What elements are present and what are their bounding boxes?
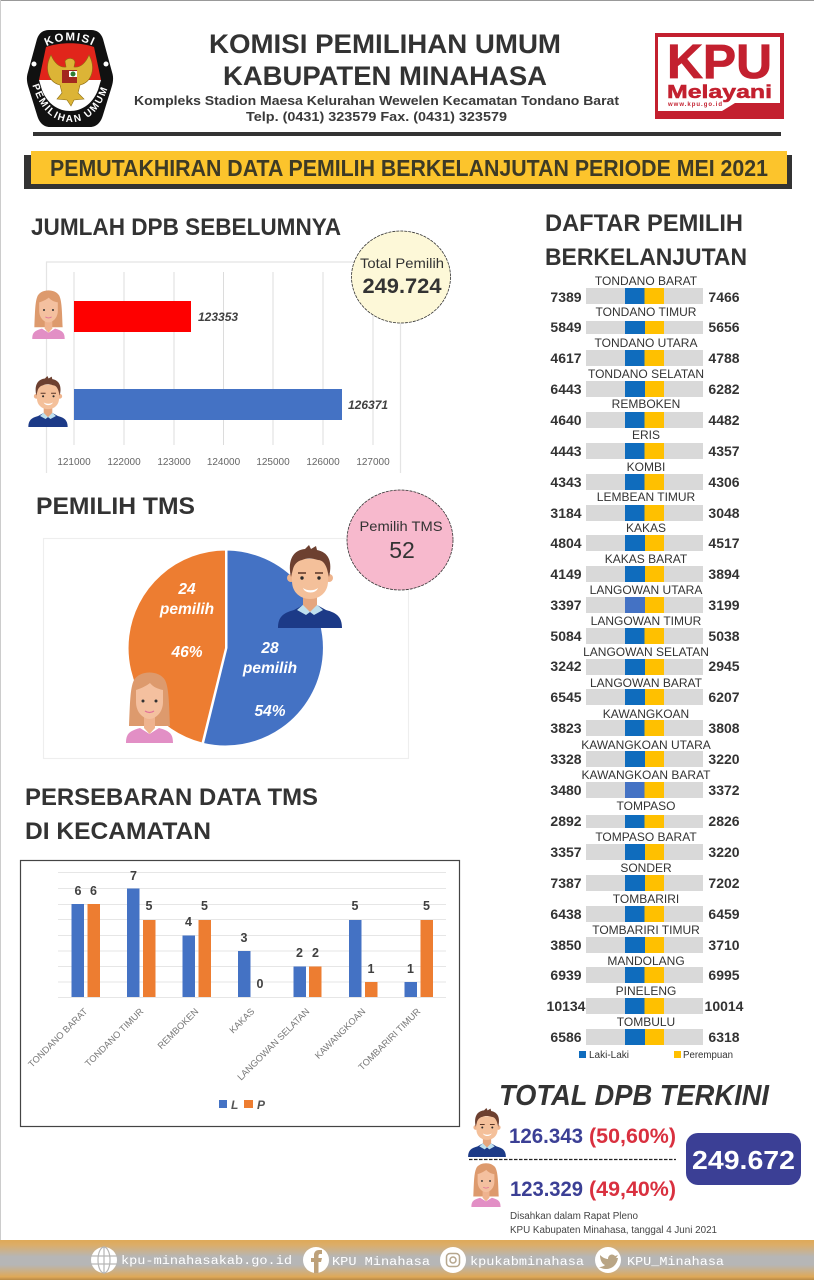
bar values: 5 [423,899,430,913]
bar: male previous [74,389,342,420]
row: Tondano Barat: 7389 [550,289,582,305]
axis labels: 121000 [57,457,91,468]
heading: TMS voters: PEMILIH TMS [36,493,195,520]
icon: man total [468,1108,506,1157]
row: Tombariri Timur [550,923,740,953]
pie labels: male: 28 [260,640,279,657]
stat: grand total [686,1133,801,1185]
row: Eris: ERIS [632,428,660,442]
row: Langowan Timur [550,614,740,644]
banner: report title [24,151,792,189]
axis labels: 122000 [107,457,141,468]
value: male previous: 126371 [348,398,388,412]
bar: female previous [74,301,191,332]
icon: man previous [28,376,68,427]
axis labels: 125000 [256,457,290,468]
panel: TMS by district bar chart [20,860,460,1126]
row: Tombulu: 6586 [550,1029,582,1045]
row: Tondano Utara [550,336,740,366]
bar values: 6 [75,884,82,898]
row: Tondano Barat: 7466 [708,289,740,305]
heading: institution name and address: Telp. (0431) 323579 Fax. (0431) 323579 [246,109,507,124]
heading: institution name and address: KABUPATEN MINAHASA [223,61,547,91]
row: Tondano Utara: 4788 [708,350,740,366]
row: Tondano Timur [550,305,740,335]
row: Langowan Barat [550,676,740,705]
row: Tompaso [550,799,740,829]
row: Langowan Selatan: 3242 [550,658,582,674]
axis labels: 126000 [306,457,340,468]
row: Tombariri [550,892,740,922]
text: website: kpu-minahasakab.go.id [121,1255,292,1268]
row: Lembean Timur: LEMBEAN TIMUR [597,490,696,504]
axis labels: 123000 [157,457,191,468]
row: Eris [550,428,740,459]
heading: voter list [545,210,747,271]
row: Tondano Timur: 5656 [708,319,740,335]
callout: TMS voters: Pemilih TMS [360,518,442,534]
icon: twitter [595,1247,621,1273]
pie labels: female: pemilih [159,601,214,618]
heading: voter list: DAFTAR PEMILIH [545,210,743,237]
row: Tompaso: 2892 [550,813,582,829]
row: Langowan Utara: 3199 [708,597,740,613]
text: approval note [510,1211,717,1236]
row: Remboken [550,397,740,428]
pie labels: female [159,581,214,661]
heading: TMS distribution: DI KECAMATAN [25,818,211,845]
row: Kakas: 4517 [708,535,740,551]
row: Kakas Barat: 3894 [708,566,740,582]
row: Tombulu: 6318 [708,1029,740,1045]
panel: voters per district [547,274,744,1045]
bar values: 6 [90,884,97,898]
pie labels: female: 24 [177,581,196,598]
stat: female total: (49,40%) [589,1178,676,1201]
row: Kawangkoan: 3823 [550,720,582,736]
heading: institution name and address [134,29,620,124]
row: Pineleng: 10134 [547,998,586,1014]
heading: previous DPB: JUMLAH DPB SEBELUMNYA [31,214,341,241]
row: Langowan Timur: LANGOWAN TIMUR [591,614,702,628]
panel: TMS pie chart [44,538,408,758]
row: Langowan Selatan: 2945 [708,658,740,674]
callout: total voters [352,231,450,323]
row: Mandolang: MANDOLANG [607,954,685,968]
row: Sonder: 7387 [550,875,582,891]
legend: voter list: Perempuan [683,1050,733,1061]
row: Langowan Timur: 5084 [550,628,582,644]
row: Sonder: 7202 [708,875,740,891]
stat: grand total: 249.672 [692,1145,795,1175]
category labels: TOMBARIRI TIMUR [356,1006,423,1072]
icon: woman TMS [126,672,173,743]
bar values: 2 [296,946,303,960]
row: Tondano Selatan: 6443 [550,381,582,397]
stat: female total [510,1178,676,1201]
heading: TMS distribution [25,784,318,845]
row: Langowan Selatan: LANGOWAN SELATAN [583,645,709,659]
icon: globe [91,1247,117,1273]
row: Langowan Selatan [550,645,740,675]
row: Kawangkoan Utara: 3328 [550,751,582,767]
stat: male total: 126.343 [509,1125,583,1148]
row: Tombariri: 6459 [708,906,740,922]
heading: institution name and address: KOMISI PEMILIHAN UMUM [209,29,561,59]
row: Pineleng: PINELENG [616,984,676,998]
category labels [26,1006,423,1082]
row: Kawangkoan Barat [550,768,740,798]
callout: TMS voters [347,490,453,590]
row: Langowan Utara: 3397 [550,597,582,613]
row: Kombi [550,460,740,490]
row: Mandolang [550,954,740,983]
footer band [0,1240,814,1280]
icon: instagram [440,1247,466,1273]
legend: voter list: Laki-Laki [589,1050,629,1061]
row: Tompaso Barat: TOMPASO BARAT [595,830,697,844]
pie slice: female [128,550,226,743]
row: Eris: 4357 [708,443,740,459]
category labels: TONDANO BARAT [26,1006,90,1069]
row: Tompaso: 2826 [708,813,740,829]
heading: institution name and address: Kompleks Stadion Maesa Kelurahan Wewelen Kecamatan Tondano Barat [134,93,620,108]
row: Tombariri: 6438 [550,906,582,922]
row: Kawangkoan Utara: 3220 [708,751,740,767]
row: Kakas: KAKAS [626,521,666,535]
row: Kawangkoan: 3808 [708,720,740,736]
category labels: REMBOKEN [156,1006,200,1051]
bar values: 2 [312,946,319,960]
row: Tondano Timur: 5849 [550,319,582,335]
row: Remboken: REMBOKEN [612,397,680,411]
row: Kakas Barat: 4149 [550,566,582,582]
row: Tondano Barat: TONDANO BARAT [595,274,698,288]
row: Pineleng [547,984,744,1014]
logo: KPU emblem [26,30,114,127]
row: Tondano Selatan: 6282 [708,381,740,397]
row: Kawangkoan Barat: 3480 [550,782,582,798]
icon: woman total [471,1163,501,1207]
bar values: 4 [185,915,192,929]
row: Tombariri Timur: 3710 [708,937,740,953]
row: Lembean Timur: 3048 [708,505,740,521]
row: Kawangkoan Barat: 3372 [708,782,740,798]
row: Kakas Barat [550,552,740,582]
bar values: 5 [352,899,359,913]
row: Langowan Utara [550,583,740,613]
category labels: LANGOWAN SELATAN [235,1006,311,1082]
header divider [33,132,781,136]
row: Kawangkoan Utara: KAWANGKOAN UTARA [581,738,711,752]
row: Langowan Barat: 6545 [550,689,582,705]
row: Tombulu [550,1015,740,1045]
row: Tombulu: TOMBULU [617,1015,675,1029]
row: Tondano Barat [550,274,740,305]
category labels: TONDANO TIMUR [83,1006,146,1069]
row: Tombariri Timur: TOMBARIRI TIMUR [592,923,700,937]
stat: female total: 123.329 [510,1178,583,1201]
text: instagram: kpukabminahasa [470,1256,584,1269]
value: female previous: 123353 [198,310,238,324]
text: twitter: KPU_Minahasa [627,1256,724,1269]
category labels: KAKAS [227,1006,256,1035]
axis labels: 124000 [207,457,241,468]
icon: man TMS [278,545,342,628]
legend: L [231,1098,238,1112]
row: Lembean Timur: 3184 [550,505,582,521]
pie labels: female: 46% [170,644,203,661]
stat: male total: (50,60%) [589,1125,676,1148]
logo: KPU emblem: KOMISI [44,32,95,46]
row: Langowan Timur: 5038 [708,628,740,644]
category labels: KAWANGKOAN [313,1006,367,1061]
row: Kombi: 4306 [708,474,740,490]
row: Tondano Selatan: TONDANO SELATAN [588,367,704,381]
logo: KPU Melayani: www.kpu.go.id [667,102,722,108]
bar values [75,869,430,991]
bar values: 0 [257,977,264,991]
heading: latest total: TOTAL DPB TERKINI [499,1080,770,1112]
row: Kawangkoan [550,707,740,736]
bar values: 1 [407,962,414,976]
pie labels: male: pemilih [242,660,297,677]
bar values: 7 [130,869,137,883]
pie labels: male [242,640,297,720]
bars: male [72,888,417,997]
row: Tompaso: TOMPASO [617,799,675,813]
row: Kakas Barat: KAKAS BARAT [605,552,688,566]
row: Tombariri: TOMBARIRI [613,892,679,906]
row: Kombi: 4343 [550,474,582,490]
row: Tondano Timur: TONDANO TIMUR [596,305,697,319]
legend [219,1098,266,1112]
row: Kakas [550,521,740,551]
text: approval note: Disahkan dalam Rapat Pleno [510,1211,638,1222]
callout: total voters: 249.724 [362,275,442,298]
pie slice: male [204,550,323,746]
legend: voter list [579,1050,733,1061]
bar values: 5 [201,899,208,913]
row: Remboken: 4640 [550,412,582,428]
heading: TMS distribution: PERSEBARAN DATA TMS [25,784,318,811]
chart: previous DPB bars [46,262,400,473]
row: Sonder: SONDER [620,861,672,875]
axis labels: 127000 [356,457,390,468]
callout: TMS voters: 52 [389,537,415,563]
icon: facebook [303,1247,329,1273]
row: Lembean Timur [550,490,740,521]
row: Tompaso Barat: 3220 [708,844,740,860]
row: Kawangkoan Barat: KAWANGKOAN BARAT [582,768,711,782]
heading: voter list: BERKELANJUTAN [545,244,747,271]
row: Langowan Barat: LANGOWAN BARAT [590,676,703,690]
pie labels: male: 54% [254,703,286,720]
logo: KPU Melayani: Melayani [667,82,772,102]
bar values: 5 [146,899,153,913]
row: Tondano Utara: TONDANO UTARA [595,336,697,350]
row: Kakas: 4804 [550,535,582,551]
row: Tondano Utara: 4617 [550,350,582,366]
row: Mandolang: 6939 [550,967,582,983]
row: Kawangkoan: KAWANGKOAN [603,707,689,721]
text: facebook: KPU Minahasa [332,1256,430,1269]
text: approval note: KPU Kabupaten Minahasa, tanggal 4 Juni 2021 [510,1225,717,1236]
row: Tondano Selatan [550,367,740,397]
row: Eris: 4443 [550,443,582,459]
icon: woman previous [32,290,65,339]
bar values: 3 [241,931,248,945]
logo: KPU Melayani [655,33,784,119]
row: Sonder [550,861,740,891]
bars: female [88,904,433,997]
row: Tombariri Timur: 3850 [550,937,582,953]
logo: KPU emblem: PEMILIHAN UMUM [32,84,108,122]
legend: P [257,1098,266,1112]
row: Remboken: 4482 [708,412,740,428]
row: Tompaso Barat: 3357 [550,844,582,860]
row: Kombi: KOMBI [627,460,665,474]
callout: total voters: Total Pemilih [360,255,444,271]
axis labels [57,457,390,468]
row: Kawangkoan Utara [550,738,740,767]
row: Langowan Barat: 6207 [708,689,740,705]
logo: KPU Melayani: KPU [667,36,772,89]
row: Tompaso Barat [550,830,740,860]
row: Mandolang: 6995 [708,967,740,983]
bar values: 1 [368,962,375,976]
dashed separator [469,1158,676,1160]
row: Pineleng: 10014 [705,998,744,1014]
row: Langowan Utara: LANGOWAN UTARA [590,583,702,597]
stat: male total [509,1125,676,1148]
